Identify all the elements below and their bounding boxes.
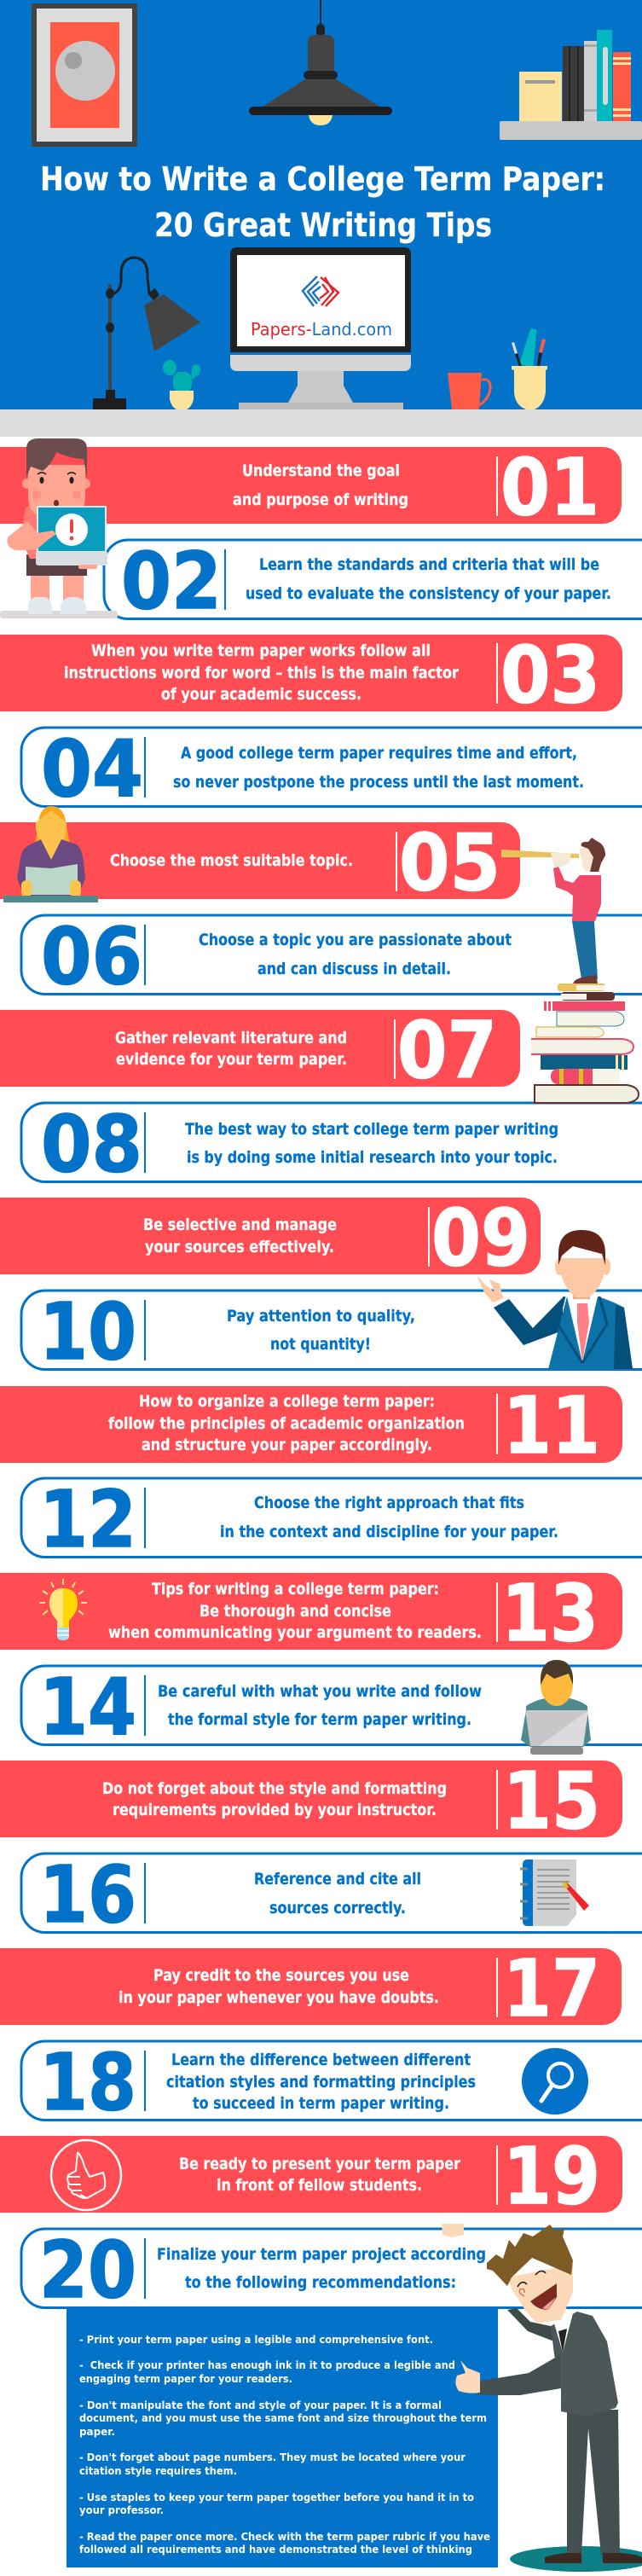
tip 08 text: is by doing some initial research into your topic. <box>187 1148 558 1167</box>
tip 17 <box>0 1943 622 2034</box>
tip 09 text: Be selective and manage <box>143 1215 337 1234</box>
tip 15 <box>0 1755 622 1847</box>
icon: light bulb <box>39 1579 87 1640</box>
tip 04 divider <box>144 737 146 798</box>
tip 03 text: instructions word for word – this is the main factor <box>64 664 460 682</box>
recommendation: staples: your professor. <box>79 2503 164 2516</box>
tip 07 text: evidence for your term paper. <box>116 1050 347 1069</box>
tip 11 number: 11 <box>503 1380 600 1471</box>
tip 01 text: Understand the goal <box>242 461 400 480</box>
tip 12 <box>21 1474 642 1565</box>
tip 13 text: Be thorough and concise <box>200 1602 391 1621</box>
tip 10 <box>21 1286 642 1378</box>
tip 08 text <box>185 1120 558 1167</box>
recommendation: staples: - Use staples to keep your term paper together before you hand it in to <box>79 2491 474 2503</box>
tip 07 number: 07 <box>397 1005 497 1096</box>
header panel <box>0 0 642 437</box>
tip 06 divider <box>144 925 146 985</box>
recommendation: font consistency: paper. <box>79 2425 115 2438</box>
tip 11 divider <box>496 1394 498 1454</box>
tip 01 number: 01 <box>500 442 599 533</box>
tip 04 number: 04 <box>41 723 143 815</box>
tip 09 divider <box>428 1207 430 1267</box>
tip 17 number: 17 <box>503 1943 600 2034</box>
tip 09 number: 09 <box>431 1192 530 1284</box>
tip 14 text: Be careful with what you write and follow <box>158 1682 482 1701</box>
recommendation: printer ink: engaging term paper for your readers. <box>79 2372 292 2385</box>
tip 14 number: 14 <box>39 1662 136 1753</box>
recommendation: font consistency: - Don't manipulate the font and style of your paper. It is a formal <box>79 2399 442 2411</box>
tip 18 text: to succeed in term paper writing. <box>193 2094 449 2113</box>
recommendation: printer ink: - Check if your printer has enough ink in it to produce a legible and <box>79 2358 455 2371</box>
tip 06 number: 06 <box>41 911 142 1002</box>
icon: Papers-Land logo <box>303 276 338 306</box>
logo wordmark: Papers-Land.com <box>251 319 392 339</box>
illustration: woman reading <box>3 806 98 902</box>
icon: notepad and pen <box>520 1859 589 1926</box>
tip 16 text <box>254 1870 421 1917</box>
tip 03 text: When you write term paper works follow all <box>91 641 431 660</box>
tip 04 <box>21 723 642 815</box>
tip 20 number: 20 <box>39 2225 136 2316</box>
tip 11 <box>0 1380 622 1471</box>
tip 14 text <box>158 1682 482 1729</box>
tip 13 text: Tips for writing a college term paper: <box>152 1580 439 1598</box>
tip 08 <box>21 1099 642 1190</box>
tip 02 number: 02 <box>121 536 222 627</box>
icon: thumbs up <box>51 2140 121 2210</box>
recommendation: read once more: followed all requirements and have demonstrated the level of thinking <box>79 2543 472 2556</box>
tip 14 text: the formal style for term paper writing. <box>168 1710 471 1729</box>
tip 18 text: citation styles and formatting principles <box>166 2073 476 2092</box>
title: 20 Great Writing Tips <box>154 206 492 244</box>
tip 02 divider <box>224 549 226 610</box>
tip 20 text: Finalize your term paper project according <box>157 2245 486 2264</box>
tip 13 <box>0 1568 622 1659</box>
tip 04 text: A good college term paper requires time and effort, <box>181 744 577 763</box>
tip 07 <box>0 1005 520 1096</box>
reader figure <box>501 838 605 983</box>
tip 15 text <box>102 1779 447 1819</box>
tip 18 number: 18 <box>39 2037 136 2128</box>
tip 11 text: How to organize a college term paper: <box>139 1392 435 1411</box>
tip 03 number: 03 <box>500 629 600 721</box>
tip 01 text <box>233 461 408 509</box>
tip 10 text: Pay attention to quality, <box>227 1307 415 1326</box>
tip 12 text: Choose the right approach that fits <box>254 1494 524 1512</box>
stack of books <box>531 983 639 1103</box>
tip 01 text: and purpose of writing <box>233 490 408 509</box>
tip 18 divider <box>144 2051 146 2111</box>
illustration: laughing man <box>442 2224 642 2572</box>
tip 13 divider <box>496 1582 498 1642</box>
tip 05 <box>0 817 520 908</box>
illustration: businessman pointing <box>477 1230 633 1369</box>
recommendation: page numbers <box>79 2451 466 2477</box>
illustration: boy with laptop <box>0 438 118 618</box>
tip 10 number: 10 <box>39 1286 136 1378</box>
tip 16 number: 16 <box>39 1849 136 1941</box>
tip 06 text: Choose a topic you are passionate about <box>199 931 512 949</box>
tip 17 divider <box>496 1958 498 2017</box>
icon: desktop monitor with logo <box>230 247 411 409</box>
tip 14 divider <box>144 1675 146 1736</box>
icon: bookshelf <box>500 30 642 140</box>
tip 09 text: your sources effectively. <box>145 1238 334 1256</box>
tip 03 divider <box>496 643 498 704</box>
tip 09 text <box>143 1215 337 1256</box>
tip 03 text <box>64 641 460 704</box>
tip 20 text <box>157 2245 486 2292</box>
recommendation: font: - Print your term paper using a legible and comprehensive font. <box>79 2333 433 2346</box>
icon: desk lamp <box>93 258 200 409</box>
icon: framed picture <box>32 3 137 147</box>
recommendation: read once more: - Read the paper once more. Check with the term paper rubric if you have <box>79 2530 490 2543</box>
recommendation: printer ink <box>79 2358 455 2385</box>
tip 05 divider <box>396 832 397 891</box>
tip 08 number: 08 <box>41 1099 142 1190</box>
tip 15 number: 15 <box>503 1755 600 1847</box>
tip 19 text: Be ready to present your term paper <box>179 2155 461 2173</box>
tip 12 number: 12 <box>39 1474 136 1565</box>
tip 07 text: Gather relevant literature and <box>115 1029 347 1047</box>
icon: coffee mug <box>448 373 490 409</box>
recommendation: font consistency: document, and you must use the same font and size throughout the term <box>79 2411 487 2424</box>
icon: hanging lamp <box>249 0 392 125</box>
tip 03 <box>0 629 622 721</box>
title <box>40 160 605 244</box>
tip 18 <box>21 2037 642 2128</box>
tip 07 text <box>115 1029 347 1069</box>
tip 01 divider <box>496 456 498 516</box>
tip 07 divider <box>394 1019 396 1079</box>
tip 10 divider <box>144 1300 146 1361</box>
tip 10 text: not quantity! <box>270 1335 371 1354</box>
tip 05 number: 05 <box>399 817 500 908</box>
tip 18 text <box>166 2051 476 2113</box>
tip 11 text: follow the principles of academic organization <box>108 1414 465 1433</box>
tip 19 text <box>179 2155 461 2195</box>
tip 06 text <box>199 931 512 978</box>
tip 13 text: when communicating your argument to readers. <box>108 1623 482 1642</box>
tip 16 divider <box>144 1863 146 1923</box>
tip 17 text: in your paper whenever you have doubts. <box>119 1988 439 2007</box>
icon: cactus <box>163 360 200 409</box>
tip 12 divider <box>144 1488 146 1548</box>
tip 19 number: 19 <box>503 2131 600 2222</box>
tip 13 number: 13 <box>501 1568 599 1659</box>
illustration: person with telescope on stack of books <box>501 838 639 1103</box>
tip 11 text: and structure your paper accordingly. <box>142 1436 432 1454</box>
icon: pencil cup <box>512 328 547 409</box>
tip 17 text: Pay credit to the sources you use <box>153 1966 409 1985</box>
tip 15 text: Do not forget about the style and formatting <box>102 1779 447 1798</box>
tip 03 text: of your academic success. <box>161 685 361 704</box>
tip 02 text <box>246 555 611 603</box>
tip 16 <box>21 1849 642 1941</box>
recommendation: read once more <box>79 2530 490 2556</box>
tip 20 <box>21 2225 642 2316</box>
tip 06 text: and can discuss in detail. <box>257 960 451 978</box>
tip 18 text: Learn the difference between different <box>171 2051 471 2069</box>
tip 04 text <box>173 744 584 792</box>
tip 20 divider <box>144 2238 146 2299</box>
illustration: student with laptop <box>521 1660 591 1755</box>
tip 01 <box>0 442 622 533</box>
tip 08 text: The best way to start college term paper writing <box>185 1120 558 1139</box>
tip 16 text: Reference and cite all <box>254 1870 421 1888</box>
tip 15 text: requirements provided by your instructor. <box>113 1801 437 1819</box>
tip 19 divider <box>496 2145 498 2205</box>
tip 16 text: sources correctly. <box>269 1899 406 1917</box>
recommendation: page numbers: citation style requires them. <box>79 2464 237 2477</box>
tip 15 divider <box>496 1770 498 1830</box>
tip 05 text: Choose the most suitable topic. <box>110 851 353 870</box>
tip 12 text <box>220 1494 558 1541</box>
tip 11 text <box>108 1392 465 1454</box>
panel: final recommendations <box>67 2309 498 2567</box>
tip 17 text <box>119 1966 439 2007</box>
tip 10 text <box>227 1307 415 1354</box>
tip 19 <box>0 2131 622 2222</box>
recommendation: staples <box>79 2491 474 2516</box>
icon: magnifying glass <box>522 2048 588 2115</box>
tip 09 <box>0 1192 541 1284</box>
recommendation: font consistency <box>79 2399 487 2438</box>
tip 06 <box>21 911 642 1002</box>
tip 12 text: in the context and discipline for your paper. <box>220 1523 558 1541</box>
tip 19 text: in front of fellow students. <box>217 2176 422 2195</box>
tip 20 text: to the following recommendations: <box>185 2273 456 2292</box>
tip 02 <box>104 536 642 627</box>
recommendation: page numbers: - Don't forget about page numbers. They must be located where your <box>79 2451 466 2463</box>
tip 14 <box>21 1660 642 1755</box>
tip 13 text <box>108 1580 482 1642</box>
tip 08 divider <box>144 1112 146 1173</box>
